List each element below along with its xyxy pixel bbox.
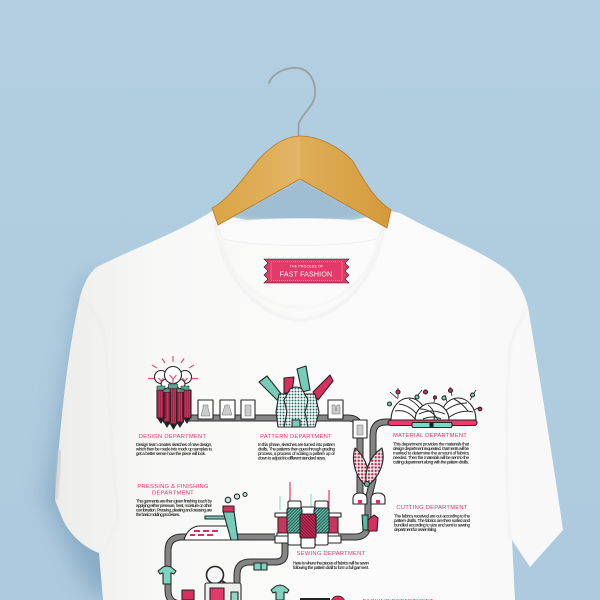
text: design department [136, 434, 212, 456]
pivot [364, 482, 370, 486]
spools [288, 501, 301, 509]
iron base [184, 526, 235, 540]
text: material department: design department requested. Garments will be [393, 446, 469, 451]
table [275, 513, 341, 517]
text: sewing department: Here is where the pieces of fabrics will be sewn [293, 560, 369, 566]
text: pattern department: PATTERN DEPARTMENT [260, 434, 332, 440]
collar rib [214, 212, 386, 320]
handles [353, 493, 367, 504]
pink bar [388, 420, 477, 426]
icon: rulers and mannequins [259, 366, 333, 427]
blue neck gap shading [236, 180, 364, 220]
text: material department: MATERIAL DEPARTMENT [393, 433, 467, 439]
text: cutting department: department for assembling. [394, 527, 437, 532]
ribbon [264, 259, 349, 283]
text: pressing and finishing department: The garments are then given finishing touch by [136, 498, 213, 504]
icon: yarn balls [388, 387, 482, 428]
pencil tips [157, 417, 191, 429]
text: cutting department: pattern drafts. The fabrics are then sorted and [394, 518, 470, 523]
text: pattern department: process, a process of scaling a pattern up or [258, 451, 336, 456]
text: pattern department: In this phase, sketches are turned into pattern [258, 442, 335, 447]
fabric rolls [287, 508, 302, 533]
iron handle [205, 516, 225, 519]
hook of the hanger [269, 68, 315, 137]
sleeve hem [56, 450, 60, 500]
icon: sewing machines [275, 482, 341, 548]
text: material department [393, 433, 470, 464]
material track [340, 422, 392, 537]
title large: FAST FASHION [280, 272, 332, 278]
text: material department: needed. Then the materials will be sent to the [393, 455, 469, 460]
threads [279, 496, 281, 510]
icon: steam iron [184, 492, 247, 540]
text: cutting department: CUTTING DEPARTMENT [396, 505, 468, 511]
stitching [271, 262, 342, 280]
text: sewing department: following the pattern draft to form a full garment. [293, 565, 369, 570]
pins [390, 387, 480, 410]
text: sewing department [293, 551, 369, 570]
lower left track [168, 537, 275, 600]
text: pressing and finishing department: PRESSING & FINISHING [137, 484, 209, 490]
t-shirt [55, 210, 563, 600]
black bar [300, 598, 330, 600]
rulers [259, 376, 282, 400]
text: pattern department [258, 434, 336, 460]
top track [186, 418, 360, 500]
machine body [205, 583, 241, 600]
text: cutting department: bundled according to size and sent to sewing [394, 522, 470, 528]
green bar [412, 422, 452, 428]
text: design department: which then be made into mock up samples to [136, 446, 212, 452]
text: pressing and finishing department: DEPARTMENT [152, 490, 194, 496]
title label [264, 259, 349, 283]
icon: design pencils and bulbs [148, 356, 198, 429]
icon: inspection machine [205, 566, 241, 600]
bulb filaments [158, 375, 188, 384]
back of collar [218, 218, 383, 246]
central mannequin [284, 387, 308, 427]
side mannequins [276, 394, 289, 427]
stand [292, 420, 300, 427]
shirt shadow [45, 280, 180, 600]
draft sketches [201, 405, 363, 435]
icon: pattern drafts [198, 400, 367, 438]
text: design department: Design team creates sketches of new design, [136, 442, 212, 447]
text: cutting department: The fabrics received are cut according to the [394, 514, 470, 518]
title small: THE PROCESS OF [290, 264, 323, 268]
text: pattern department: down to adjust it to different standard sizes. [258, 456, 326, 460]
text: cutting department [394, 505, 470, 532]
icon: book [182, 590, 194, 600]
lower middle track [237, 540, 285, 590]
text: material department: marked to determine the amount of fabrics [393, 450, 470, 456]
text: design department: DESIGN DEPARTMENT [139, 434, 206, 440]
icon: scissors [353, 448, 385, 531]
pencils [157, 388, 191, 424]
text: pressing and finishing department: the basic molding processes. [136, 512, 180, 517]
text: material department: cutting department along with the pattern drafts. [393, 460, 469, 464]
text: pressing and finishing department [136, 484, 213, 517]
shirt body [55, 210, 563, 600]
cut fabric [362, 515, 368, 530]
clasp [430, 422, 433, 426]
wooden hanger [212, 136, 391, 228]
process tracks [168, 418, 392, 600]
bottom elements [300, 596, 434, 600]
red circle [331, 596, 345, 600]
sleeve seams [80, 296, 528, 553]
magnifier [222, 581, 230, 586]
text: pressing and finishing department: applying either pressure, heat, moisture or other [136, 503, 212, 508]
blades [354, 448, 368, 486]
rays [148, 356, 198, 378]
text: pressing and finishing department: combination. Pressing, pleating and creasing are [136, 508, 212, 512]
text: sewing department: SEWING DEPARTMENT [297, 551, 366, 557]
text: pattern department: drafts. The patterns then goes through grading [258, 446, 335, 452]
steam bubbles [225, 497, 231, 503]
bulbs [154, 370, 168, 384]
text: design department: get a better sense how the piece will look. [136, 451, 206, 456]
icon: small shirts [158, 563, 289, 600]
yarn domes [391, 398, 427, 420]
ferrules [157, 384, 189, 392]
text: material department: This department provides the materials that [393, 442, 470, 446]
